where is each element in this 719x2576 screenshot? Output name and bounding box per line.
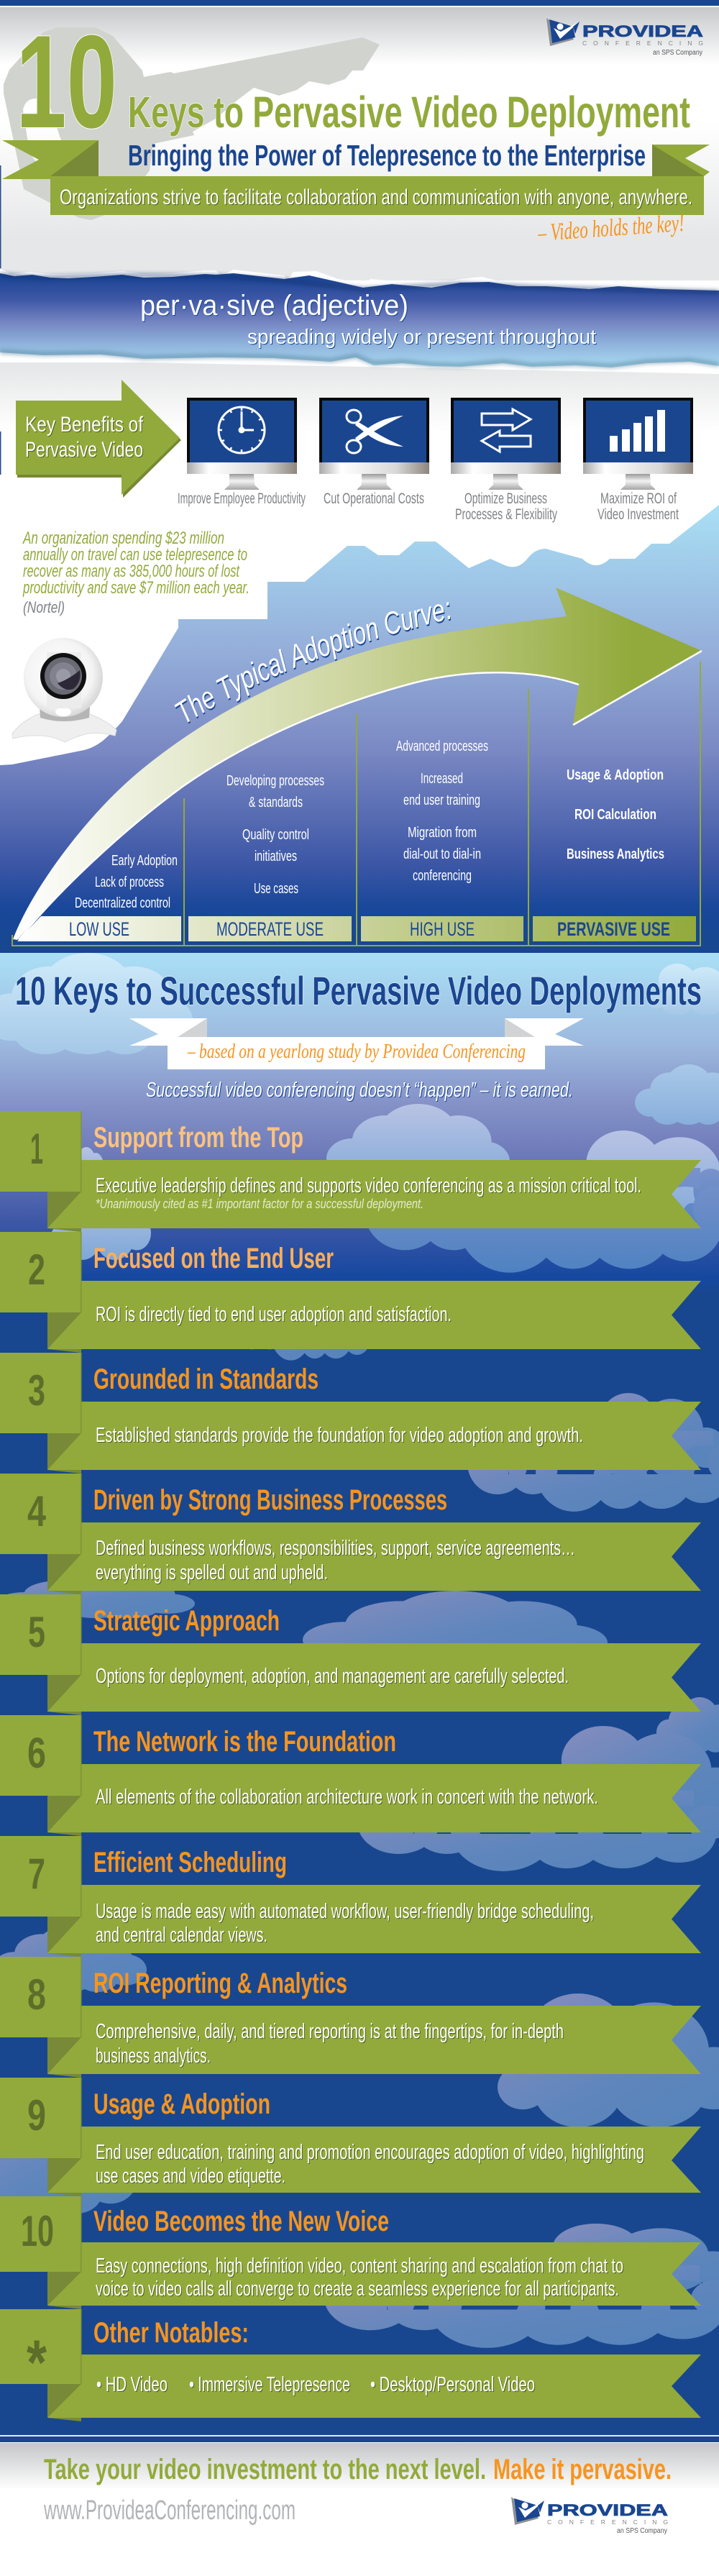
benefit captions: Maximize ROI of (600, 490, 677, 507)
column: high use: end user training (403, 793, 480, 808)
quote: travel savings: annually on travel can use telepresence to (23, 545, 247, 565)
panel: key 1 (0, 1111, 701, 1232)
panel: key 7: 7 (28, 1850, 45, 1898)
curved arrow (13, 588, 702, 940)
column: high use: dial-out to dial-in (403, 846, 481, 862)
icon: monitor with arrows (451, 398, 561, 490)
column: pervasive use (533, 767, 696, 941)
icon: key silhouette (4, 27, 380, 220)
panel: key 8: 8 (27, 1970, 46, 2019)
benefit captions (178, 490, 679, 523)
panel: key 6: The Network is the Foundation (93, 1726, 396, 1758)
title number 10: 10 (16, 7, 117, 155)
column: low use (17, 853, 181, 941)
quote: travel savings: An organization spending $23 million (22, 529, 224, 548)
panel: adoption curve (0, 505, 719, 953)
logo: CONFERENCING (582, 40, 703, 47)
column: moderate use (188, 773, 352, 941)
column: moderate use: Developing processes (226, 773, 324, 789)
benefit captions: Cut Operational Costs (324, 490, 424, 507)
column: pervasive use: Usage & Adoption (567, 767, 664, 783)
panel: key 9: use cases and video etiquette. (96, 2165, 285, 2188)
panel: key 10: 10 (21, 2207, 54, 2255)
panel: key 7: Efficient Scheduling (93, 1847, 287, 1878)
column: low use: Decentralized control (75, 895, 170, 911)
panel: key 2: Focused on the End User (93, 1243, 334, 1274)
white ribbon: study note: – based on a yearlong study by Providea Conferencing (187, 1040, 526, 1063)
panel: key 8 (0, 1957, 701, 2078)
definition meaning: spreading widely or present throughout (247, 326, 596, 349)
website url: www.ProvideaConferencing.com (43, 2495, 296, 2526)
column: high use (361, 739, 523, 941)
benefit captions: Video Investment (597, 506, 679, 523)
panel: header (2, 7, 710, 247)
logo: an SPS Company (653, 49, 702, 57)
white ribbon: study note (129, 1018, 584, 1069)
chart axes (12, 662, 700, 946)
icon: webcam (12, 638, 116, 742)
panel: key 2: 2 (28, 1246, 45, 1294)
column: high use: Advanced processes (396, 739, 488, 754)
icon: monitor with clock (187, 398, 297, 490)
column: moderate use: initiatives (255, 849, 297, 864)
heading: the typical adoption curve: The Typical Adoption Curve: (174, 602, 452, 723)
panel: key 6 (0, 1715, 701, 1836)
panel: other notables: * (27, 2326, 47, 2398)
panel: key 4 (0, 1474, 701, 1594)
panel: key 8: business analytics. (96, 2045, 211, 2068)
column: high use: Increased (421, 771, 463, 787)
panel: key 9: Usage & Adoption (93, 2088, 270, 2120)
panel: key 7 (0, 1836, 701, 1957)
logo: PROVIDEA (582, 22, 703, 40)
panel: key 4: everything is spelled out and upheld. (96, 1561, 328, 1584)
panel: key 3: Grounded in Standards (93, 1364, 319, 1395)
panel: ten keys intro (15, 968, 702, 1102)
column: low use: Early Adoption (111, 853, 178, 869)
panel: key benefits (16, 380, 693, 523)
benefit captions: Processes & Flexibility (455, 506, 557, 523)
panel: key 6: 6 (27, 1729, 46, 1777)
panel: key 3: 3 (28, 1366, 45, 1415)
panel: other notables: • Desktop/Personal Video (370, 2373, 535, 2396)
panel: key 2 (0, 1232, 701, 1353)
panel: key 4: Driven by Strong Business Processes (93, 1484, 447, 1516)
column: pervasive use: Business Analytics (567, 846, 664, 862)
logo: PROVIDEA (547, 2501, 668, 2519)
panel: key 5 (0, 1594, 701, 1715)
panel: key 9 (0, 2078, 701, 2196)
panel: key 10: Video Becomes the New Voice (93, 2206, 389, 2237)
column: moderate use: Quality control (242, 827, 309, 843)
panel: key 1: *Unanimously cited as #1 important factor for a successful deployment. (96, 1197, 423, 1211)
column: high use: Migration from (408, 825, 477, 841)
benefit captions: Optimize Business (464, 490, 547, 507)
panel: key 5: Strategic Approach (93, 1605, 280, 1637)
column: moderate use: MODERATE USE (216, 918, 324, 940)
panel: key 7: and central calendar views. (96, 1924, 267, 1947)
arrow: key benefits of pervasive video (16, 380, 181, 498)
panel: key 10 (0, 2196, 701, 2309)
panel: ten keys background with clouds (0, 953, 719, 2435)
panel: key 5: 5 (28, 1608, 45, 1656)
logo (511, 2497, 668, 2535)
benefit captions: Improve Employee Productivity (178, 490, 306, 507)
logo: CONFERENCING (547, 2518, 668, 2526)
panel: other notables (0, 2309, 701, 2421)
logo (546, 18, 703, 57)
column: low use: Lack of process (95, 874, 164, 890)
call to action: Take your video investment to the next level. (44, 2454, 486, 2485)
column: moderate use: Use cases (254, 881, 298, 897)
panel: key 2: ROI is directly tied to end user adoption and satisfaction. (96, 1303, 452, 1326)
panel: key 3 (0, 1353, 701, 1474)
panel: other notables: • HD Video (96, 2373, 168, 2396)
panel: key 9: 9 (27, 2091, 46, 2139)
column: pervasive use: PERVASIVE USE (557, 918, 670, 940)
panel: footer (0, 2435, 719, 2535)
tagline: Successful video conferencing doesn’t “happen” – it is earned. (146, 1079, 573, 1102)
panel: other notables: • Immersive Telepresence (189, 2373, 350, 2396)
column: high use: conferencing (413, 868, 472, 884)
panel: definition torn-paper band (0, 268, 719, 431)
definition word: per·va·sive (adjective) (140, 290, 408, 321)
arrow: key benefits of pervasive video: Key Benefits of (25, 413, 144, 437)
arrow: key benefits of pervasive video: Pervasive Video (25, 438, 143, 462)
ribbon: intro statement (2, 140, 710, 215)
panel: key 8: ROI Reporting & Analytics (93, 1968, 347, 1999)
quote: travel savings: (Nortel) (23, 598, 65, 616)
sky background shape (0, 505, 719, 953)
column: low use: LOW USE (69, 918, 129, 940)
column: high use: HIGH USE (410, 918, 475, 940)
icon: monitor with scissors (319, 398, 429, 490)
logo: an SPS Company (617, 2527, 667, 2535)
column: pervasive use: ROI Calculation (574, 807, 656, 823)
panel: key 4: 4 (27, 1487, 46, 1535)
quote: travel savings: recover as many as 385,000 hours of lost (23, 562, 240, 581)
panel: key 1: 1 (30, 1125, 43, 1173)
quote: travel savings (22, 529, 249, 616)
icon: monitor with bar chart (583, 398, 693, 490)
panel: other notables: Other Notables: (93, 2317, 249, 2349)
column: moderate use: & standards (249, 795, 303, 810)
panel: key 1: Support from the Top (93, 1122, 303, 1154)
quote: travel savings: productivity and save $7 million each year. (22, 578, 249, 598)
